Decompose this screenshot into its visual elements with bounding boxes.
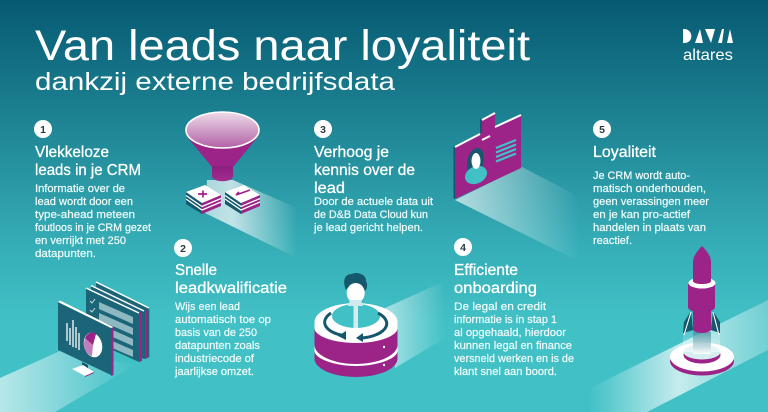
step 4 text: De legal en credit xyxy=(454,301,546,313)
icon: monitor and data panels xyxy=(58,282,149,377)
step 2 text: industriecode of xyxy=(175,353,254,365)
step 2 text: Wijs een lead xyxy=(175,301,240,313)
step 1 text: datapunten. xyxy=(35,248,96,260)
step 4 text xyxy=(454,238,574,378)
step 2 text: Snelle xyxy=(175,262,217,279)
step 1 text: Vlekkeloze xyxy=(35,144,109,161)
step 2 text xyxy=(174,239,287,378)
step 4 text: Efficiente xyxy=(454,262,518,279)
step 1 text: Informatie over de xyxy=(35,183,125,195)
step 4 text: informatie is in stap 1 xyxy=(454,314,557,326)
icon: funnel with stacks xyxy=(186,112,260,214)
logo: altares data: altares xyxy=(683,47,733,64)
subtitle: dankzij externe bedrijfsdata xyxy=(35,68,395,96)
step 3 text: lead xyxy=(314,180,345,197)
step 1 text: lead wordt door een xyxy=(35,196,133,208)
step 3 text: 3 xyxy=(320,124,326,136)
step 1 text xyxy=(34,120,151,260)
step 2 text: 2 xyxy=(180,243,186,255)
step 5 text: en je kan pro-actief xyxy=(593,209,690,221)
icon: database with person xyxy=(314,273,398,377)
logo: altares data xyxy=(683,29,733,64)
step 1 text: leads in je CRM xyxy=(35,162,141,179)
step 3 text: Door de actuele data uit xyxy=(314,196,433,208)
step 2 text: basis van de 250 xyxy=(175,327,257,339)
step 4 text: al opgehaald, hierdoor xyxy=(454,327,566,339)
step 2 text: automatisch toe op xyxy=(175,314,271,326)
step 3 text: je lead gericht helpen. xyxy=(313,222,423,234)
step 5 text: Je CRM wordt auto- xyxy=(593,170,690,182)
step 2 text: jaarlijkse omzet. xyxy=(174,366,254,378)
step 5 text: 5 xyxy=(599,124,605,136)
icon: rocket xyxy=(670,246,734,376)
step 1 text: en verrijkt met 250 xyxy=(35,235,126,247)
step 3 text: Verhoog je xyxy=(314,144,389,161)
step 2 text: leadkwalificatie xyxy=(175,280,287,297)
step 5 text: reactief. xyxy=(593,235,632,247)
title: Van leads naar loyaliteit xyxy=(35,22,530,70)
step 1 text: foutloos in je CRM gezet xyxy=(35,222,151,234)
step 5 text: handelen in plaats van xyxy=(593,222,706,234)
step 4 text: 4 xyxy=(460,242,466,254)
step 4 text: klant snel aan boord. xyxy=(454,366,557,378)
step 3 text xyxy=(313,120,433,234)
step 5 text xyxy=(593,120,709,247)
step 4 text: onboarding xyxy=(454,280,537,297)
step 1 text: 1 xyxy=(40,124,46,136)
step 5 text: Loyaliteit xyxy=(593,144,657,161)
step 4 text: kunnen legal en finance xyxy=(454,340,572,352)
step 3 text: kennis over de xyxy=(314,162,415,179)
step 1 text: type-ahead meteen xyxy=(35,209,135,221)
light beams xyxy=(0,167,768,412)
step 2 text: datapunten zoals xyxy=(175,340,260,352)
step 4 text: versneld werken en is de xyxy=(454,353,574,365)
step 5 text: matisch onderhouden, xyxy=(593,183,706,195)
icon: id card xyxy=(454,113,521,199)
step 5 text: geen verassingen meer xyxy=(593,196,709,208)
step 3 text: de D&B Data Cloud kun xyxy=(314,209,428,221)
